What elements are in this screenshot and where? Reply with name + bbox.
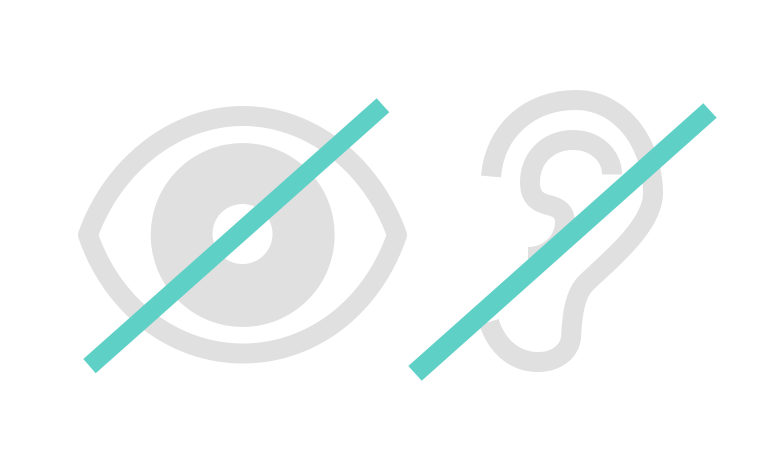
slash over ear (408, 103, 717, 381)
icon: crossed-out ear (408, 100, 717, 381)
slash over eye (83, 98, 389, 373)
iris and pupil (151, 143, 335, 327)
inner ear curve (528, 140, 612, 257)
eye outline (88, 116, 397, 354)
icon: crossed-out eye (83, 98, 397, 373)
outer ear curve (489, 100, 653, 362)
ear outline (489, 100, 653, 362)
